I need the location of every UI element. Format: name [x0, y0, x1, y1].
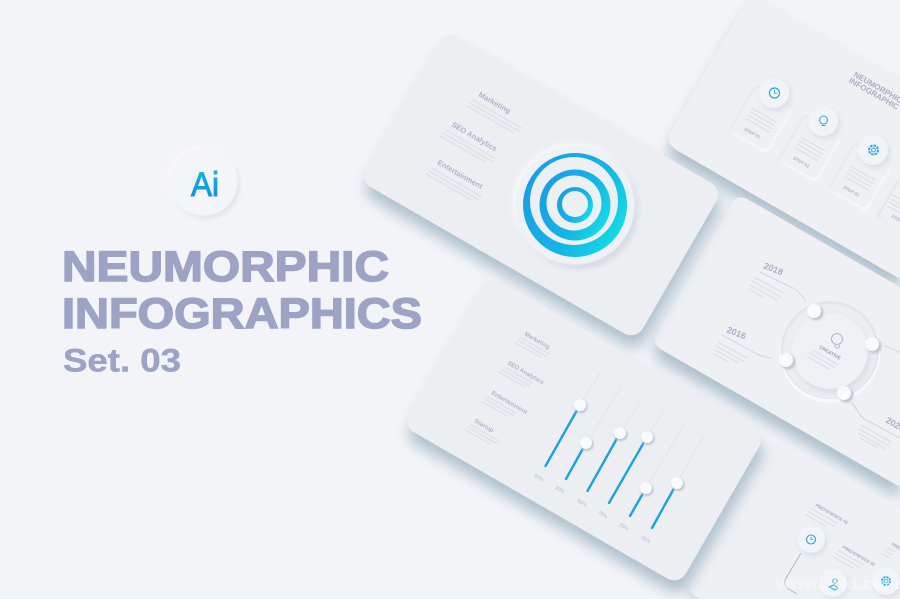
- connector line: [785, 553, 801, 594]
- text block: marketing: Marketing: [477, 90, 513, 116]
- label: 2018: 2018: [762, 261, 785, 277]
- label: creative: [807, 342, 843, 372]
- icon: ai badge: [169, 147, 239, 218]
- label: preference 02: PREFERENCE 02: [842, 545, 876, 568]
- panel: steps: [669, 0, 900, 291]
- text block: seo analytics: SEO Analytics: [506, 361, 545, 386]
- knob: right: [865, 337, 882, 354]
- knob: top: [807, 304, 824, 320]
- text block: marketing: [467, 87, 529, 136]
- connector: 2018: [760, 272, 805, 300]
- panel: connected icons: [689, 444, 900, 599]
- note: 2024: [858, 425, 891, 449]
- slider percent labels: 25%: [618, 522, 630, 533]
- circular dial: [780, 301, 880, 403]
- icon: bulb outline: [832, 334, 842, 348]
- text block: startup: Startup: [473, 419, 494, 434]
- slider 4: [609, 411, 663, 503]
- label: preference 02: [833, 543, 876, 577]
- slider percent labels: 35%: [640, 535, 652, 546]
- icon: clock button: [759, 78, 791, 111]
- label: preference 01: PREFERENCE 01: [814, 503, 849, 526]
- slider percent labels: [533, 473, 652, 546]
- icon: ai badge: Ai: [191, 166, 219, 204]
- icon: bulb button: [808, 106, 840, 139]
- panel title: neumorphic infographic: INFOGRAPHIC: [847, 76, 900, 112]
- slider 3: [588, 399, 642, 491]
- watermark: www.25xt.com: [775, 574, 900, 593]
- slider percent labels: 85%: [576, 498, 588, 509]
- panel: slider chart: [402, 275, 768, 597]
- slider 6: [652, 434, 705, 528]
- icon: gear button: [858, 135, 890, 168]
- slider percent labels: 30%: [554, 485, 566, 496]
- text block: seo analytics: [440, 117, 502, 166]
- target chart: [513, 143, 638, 269]
- note: 2018: [749, 277, 783, 300]
- text block: marketing: [515, 330, 554, 361]
- slider 1: [546, 373, 600, 466]
- knob: bottom: [837, 386, 854, 402]
- slider 5: [630, 423, 685, 516]
- text block: entertainment: [482, 389, 528, 424]
- title: INFOGRAPHICS: [62, 290, 422, 338]
- title: [62, 243, 422, 338]
- icon: clock button: [797, 525, 827, 556]
- step card 03: STEP 03: [842, 184, 861, 198]
- label: creative: CREATIVE: [818, 345, 842, 362]
- label: preference 01: [806, 501, 849, 535]
- slider percent labels: 70%: [597, 510, 609, 521]
- label: 2016: 2016: [725, 325, 748, 341]
- text block: seo analytics: SEO Analytics: [450, 120, 499, 153]
- step card 02: [778, 114, 843, 183]
- note: 2016: [714, 342, 747, 363]
- text block: entertainment: Entertainment: [436, 158, 485, 191]
- icon: person button: [819, 569, 848, 598]
- knob: left: [779, 353, 796, 370]
- panel: creative timeline: [654, 197, 900, 499]
- step card 03: [828, 143, 893, 212]
- text block: entertainment: Entertainment: [490, 391, 528, 416]
- icon: gear button: [872, 567, 900, 598]
- step card 04: [877, 177, 900, 229]
- step card 01: [729, 85, 794, 154]
- step card 02: STEP 02: [792, 155, 811, 169]
- step card 01: STEP 01: [743, 126, 762, 140]
- text block: startup: [465, 417, 504, 448]
- title: NEUMORPHIC: [62, 243, 389, 291]
- text block: seo analytics: [498, 359, 545, 394]
- connector: 2024: [852, 403, 900, 438]
- subtitle: Set. 03: [63, 342, 181, 378]
- slider percent labels: 60%: [533, 473, 545, 484]
- text block: entertainment: [426, 155, 488, 204]
- connector: right: [885, 346, 900, 352]
- connector: 2016: [722, 335, 772, 358]
- text block: marketing: Marketing: [523, 332, 551, 351]
- label: preference 03: [882, 540, 900, 562]
- panel: target diagram: [359, 30, 725, 352]
- slider 2: [566, 386, 622, 479]
